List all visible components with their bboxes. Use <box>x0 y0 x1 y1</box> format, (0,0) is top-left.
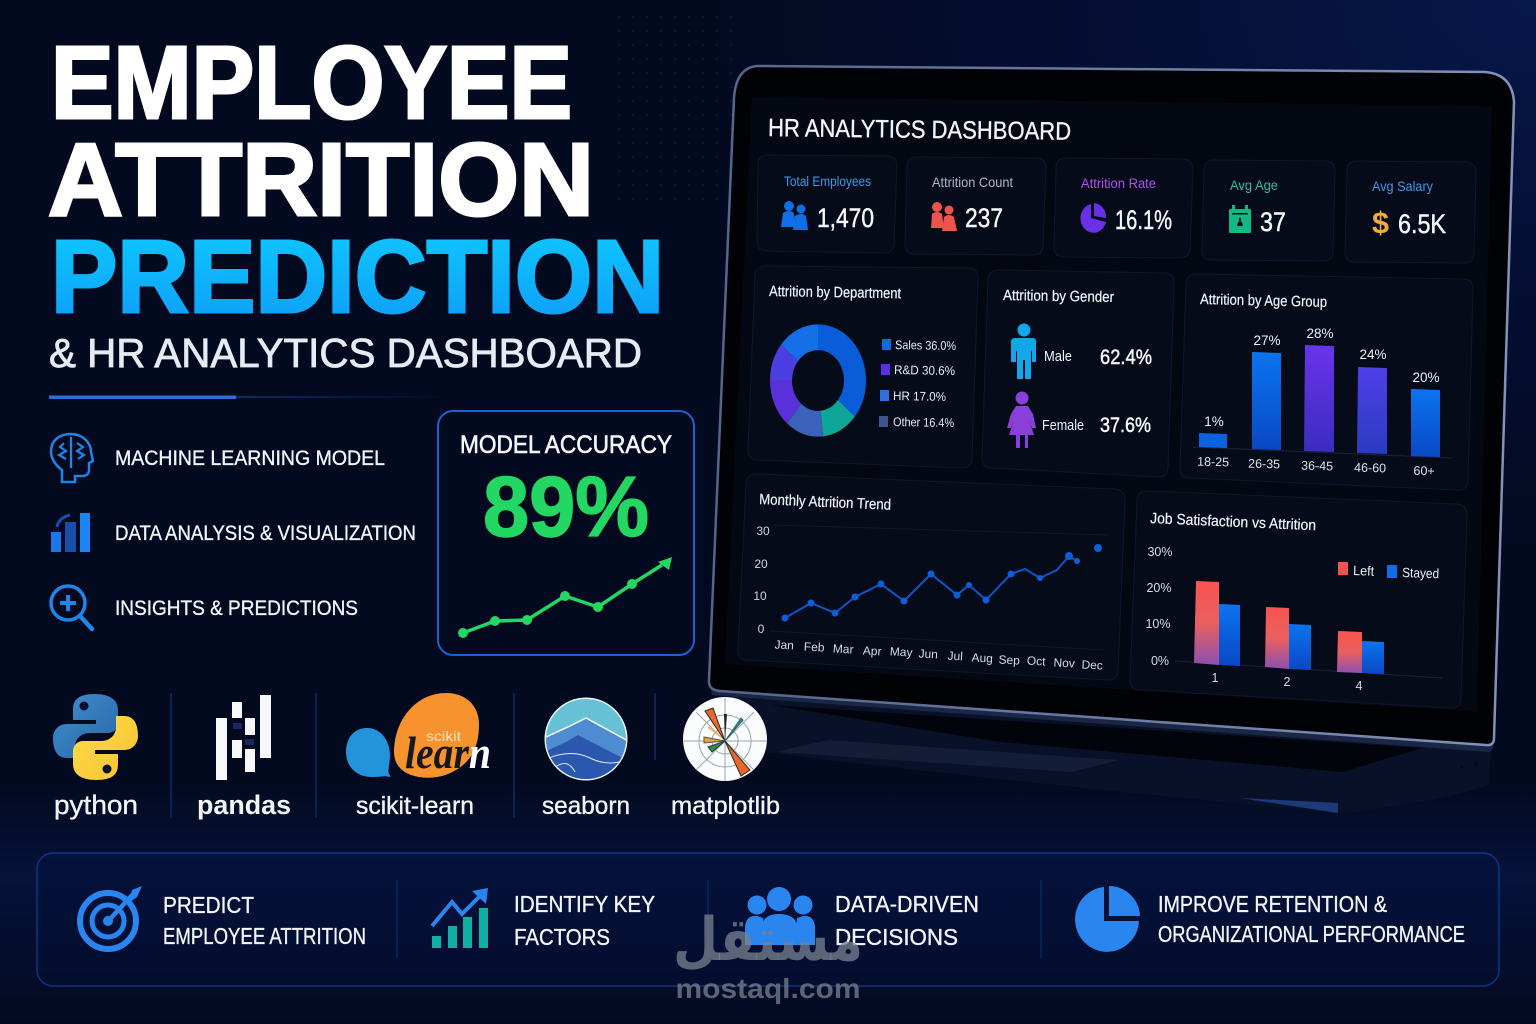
feature: data analysis: DATA ANALYSIS & VISUALIZATION <box>115 521 416 545</box>
panel: total employees <box>757 155 897 253</box>
laptop <box>709 66 1514 813</box>
line chart: 10 <box>753 589 767 603</box>
line chart: 30 <box>756 524 770 538</box>
panel: monthly attrition trend: Monthly Attrition Trend <box>759 491 891 514</box>
bar chart: age groups: 46-60 <box>1354 461 1386 475</box>
panel: total employees: Total Employees <box>784 173 871 189</box>
benefit: predict: EMPLOYEE ATTRITION <box>163 923 366 949</box>
icon: growth chart <box>432 888 488 948</box>
bar chart: age groups: 60+ <box>1413 464 1435 478</box>
icon: scikit-learn logo <box>346 693 491 778</box>
feature: machine learning model: MACHINE LEARNING MODEL <box>115 446 385 470</box>
panel: attrition count: 237 <box>965 203 1003 233</box>
icon: team <box>745 887 815 945</box>
line chart: Nov <box>1053 655 1075 671</box>
panel: attrition rate: 16.1% <box>1115 205 1172 235</box>
icon: calendar <box>1229 205 1251 233</box>
line chart: Mar <box>833 641 854 657</box>
line chart <box>753 524 1108 673</box>
laptop bezel <box>709 66 1514 745</box>
line chart: Sep <box>998 652 1021 668</box>
benefit: improve retention: IMPROVE RETENTION & <box>1158 891 1387 917</box>
benefit: data-driven decisions: DECISIONS <box>835 924 958 950</box>
bar chart: age groups: 36-45 <box>1301 459 1333 473</box>
line chart: Aug <box>971 650 993 666</box>
icon: pie purple <box>1080 203 1106 233</box>
line chart: 20 <box>754 557 768 571</box>
panel: monthly attrition trend <box>738 474 1125 680</box>
department legend: Other 16.4% <box>893 415 954 430</box>
line chart: Jul <box>947 649 963 663</box>
title <box>48 25 664 334</box>
panel: total employees: 1,470 <box>817 203 874 233</box>
chart legend <box>1338 562 1439 581</box>
title: EMPLOYEE <box>51 25 572 140</box>
panel: attrition rate: Attrition Rate <box>1081 175 1156 191</box>
icon: bars <box>51 513 90 552</box>
panel: attrition by department: Attrition by Department <box>769 283 902 302</box>
department legend: Sales 36.0% <box>895 338 956 353</box>
title rule <box>49 396 446 399</box>
icon: seaborn logo <box>544 698 630 782</box>
panel: average salary: Avg Salary <box>1372 178 1433 194</box>
grouped bar chart: 30% <box>1147 545 1173 559</box>
icon: people blue <box>781 201 808 230</box>
bar chart: age groups: 20% <box>1412 370 1440 385</box>
title: ATTRITION <box>48 122 594 237</box>
watermark: mostaql.com <box>676 973 860 1004</box>
icon: dollar: $ <box>1372 205 1389 240</box>
bar chart: age groups: 26-35 <box>1248 457 1280 471</box>
label: scikit-learn: scikit-learn <box>356 792 474 820</box>
panel: attrition by gender: Female <box>1042 418 1084 434</box>
panel: attrition by gender: Attrition by Gender <box>1003 287 1114 306</box>
line chart: Oct <box>1027 654 1047 669</box>
benefit: identify key factors <box>514 891 655 950</box>
chart legend: Stayed <box>1402 565 1439 581</box>
dashboard heading: HR ANALYTICS DASHBOARD <box>768 114 1071 146</box>
benefit: predict: PREDICT <box>163 892 254 918</box>
grouped bar chart: 2 <box>1284 675 1291 689</box>
accuracy value: 89% <box>483 460 649 555</box>
panel: attrition by gender: Male <box>1044 349 1072 365</box>
grouped bar chart: 10% <box>1145 617 1171 631</box>
panel: average salary: 6.5K <box>1398 209 1446 239</box>
laptop base <box>710 686 1494 813</box>
icon: magnifier <box>51 586 92 629</box>
panel: attrition by gender: 37.6% <box>1100 414 1151 437</box>
line chart: 0 <box>758 622 765 636</box>
feature list <box>51 434 416 629</box>
panel: attrition by gender: 62.4% <box>1100 346 1152 369</box>
line chart: May <box>890 644 913 660</box>
bar chart: age groups: 27% <box>1253 333 1281 348</box>
icon: male figure <box>1011 324 1036 379</box>
icon: pie <box>1075 886 1140 952</box>
line chart: Jan <box>774 638 794 653</box>
line chart: Dec <box>1081 657 1103 673</box>
panel: job satisfaction vs attrition: Job Satisfaction vs Attrition <box>1150 510 1316 534</box>
icon: female figure <box>1007 392 1036 448</box>
panel: attrition by age group: Attrition by Age Group <box>1200 291 1327 311</box>
icon: target <box>80 886 142 949</box>
grouped bar chart: 4 <box>1356 679 1363 693</box>
grouped bar chart: 1 <box>1212 671 1219 685</box>
panel: average age <box>1202 160 1335 261</box>
accuracy heading: MODEL ACCURACY <box>460 431 672 459</box>
panel: bottom benefits strip <box>37 853 1499 986</box>
bar chart: age groups: 24% <box>1359 347 1387 362</box>
label: python: python <box>54 790 138 820</box>
icon: machine learning head <box>51 434 93 482</box>
department legend <box>879 338 956 430</box>
panel: attrition rate <box>1054 158 1193 258</box>
label: matplotlib: matplotlib <box>671 792 780 820</box>
line chart: Feb <box>804 639 825 655</box>
chart legend: Left <box>1353 563 1375 579</box>
panel: attrition by age group <box>1180 274 1473 490</box>
icon: pandas logo <box>216 695 271 780</box>
panel: job satisfaction vs attrition <box>1130 491 1467 708</box>
label: seaborn: seaborn <box>542 792 630 820</box>
benefit: identify key factors: IDENTIFY KEY <box>514 891 655 917</box>
icon: scikit-learn logo: scikit <box>426 728 461 744</box>
grouped bar chart <box>1145 545 1442 693</box>
bar chart: age groups <box>1193 326 1452 478</box>
feature: insights: INSIGHTS & PREDICTIONS <box>115 596 358 620</box>
panel: attrition by gender <box>982 270 1174 477</box>
panel: average age: Avg Age <box>1230 177 1278 193</box>
benefit: improve retention: ORGANIZATIONAL PERFORMANCE <box>1158 921 1465 947</box>
icon: scikit-learn logo: learn <box>405 727 491 778</box>
benefit: improve retention <box>1158 891 1465 947</box>
line chart: Apr <box>863 644 882 658</box>
department legend: HR 17.0% <box>893 389 946 404</box>
logos row <box>53 693 780 820</box>
benefit: identify key factors: FACTORS <box>514 924 610 950</box>
benefit: data-driven decisions <box>835 891 979 950</box>
panel: average age: 37 <box>1260 207 1286 237</box>
icon: python logo <box>53 694 138 780</box>
line chart: Jun <box>918 647 938 662</box>
panel: attrition by department <box>748 266 978 468</box>
department legend: R&D 30.6% <box>894 363 955 378</box>
subtitle: & HR ANALYTICS DASHBOARD <box>49 330 642 376</box>
benefit: predict <box>163 892 366 949</box>
panel: attrition count: Attrition Count <box>932 174 1013 190</box>
icon: people red <box>931 202 957 231</box>
bar chart: age groups: 1% <box>1204 414 1224 429</box>
panel: model accuracy <box>438 411 694 655</box>
grouped bar chart: 20% <box>1146 581 1172 595</box>
bar chart: age groups: 18-25 <box>1197 455 1229 469</box>
label: pandas: pandas <box>197 790 291 820</box>
panel: average salary <box>1345 161 1476 263</box>
watermark: مستقل <box>673 906 863 975</box>
accuracy sparkline <box>458 557 672 638</box>
icon: matplotlib logo <box>683 697 767 781</box>
panel: attrition count <box>905 157 1046 255</box>
bar chart: age groups: 28% <box>1306 326 1334 341</box>
grouped bar chart: 0% <box>1151 654 1169 668</box>
benefit: data-driven decisions: DATA-DRIVEN <box>835 891 979 917</box>
laptop screen <box>725 97 1492 712</box>
title: PREDICTION <box>51 219 664 334</box>
donut chart <box>766 320 870 441</box>
